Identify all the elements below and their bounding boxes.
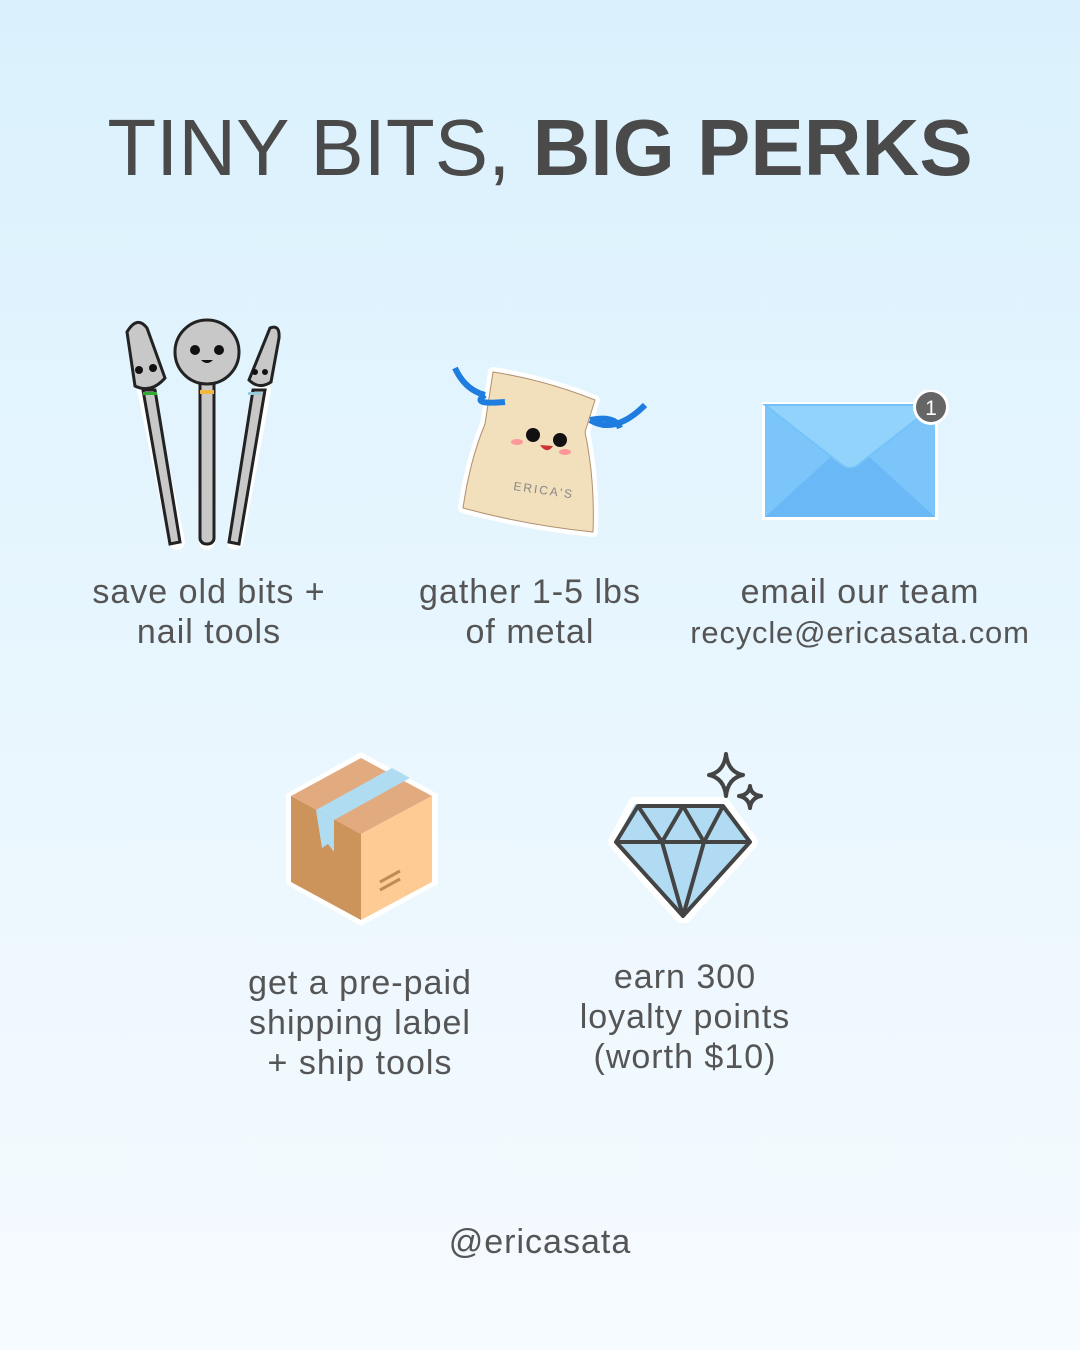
icon: envelope with badge [762,390,949,520]
caption: shipping label: get a pre-paid [248,964,472,1002]
caption: loyalty points: (worth $10) [594,1038,776,1076]
caption: email [690,573,1030,650]
caption: shipping label: + ship tools [268,1044,452,1082]
caption: gather metal [419,573,641,651]
icon: pouch [452,366,648,537]
caption: gather metal: gather 1-5 lbs [419,573,641,611]
icon: envelope with badge: 1 [925,397,937,420]
icon: diamond [608,752,763,923]
caption: email: email our team [741,573,979,611]
caption: save old bits: save old bits + [92,573,326,611]
caption: email: recycle@ericasata.com [690,615,1030,650]
caption: save old bits [92,573,326,651]
handle: @ericasata [449,1223,631,1261]
caption: loyalty points [580,958,790,1076]
caption: gather metal: of metal [466,613,594,651]
title: TINY BITS, BIG PERKS [107,103,973,192]
icon: nail bits [125,318,281,550]
caption: shipping label [248,964,472,1082]
caption: loyalty points: earn 300 [614,958,756,996]
caption: loyalty points: loyalty points [580,998,790,1036]
logo text: ERICA'S [513,479,575,501]
caption: shipping label: shipping label [249,1004,471,1042]
icon: box [286,752,438,926]
caption: save old bits: nail tools [137,613,281,651]
